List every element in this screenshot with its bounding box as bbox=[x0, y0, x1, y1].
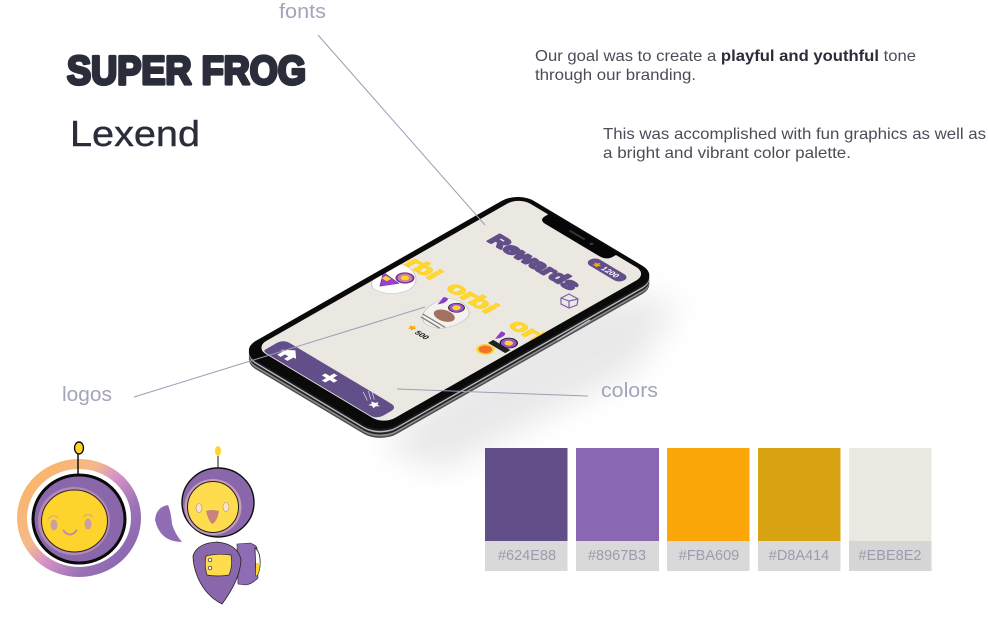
callout line: colors bbox=[397, 389, 588, 396]
phone side button bbox=[557, 320, 590, 340]
mascot head bbox=[182, 468, 254, 537]
text block: goal: Our goal was to create a playful and youthful tone bbox=[535, 48, 916, 65]
coin badge: 1200: 1200 bbox=[599, 265, 622, 279]
swatch: EBE8E2 bbox=[849, 448, 932, 571]
swatch: FBA609: #FBA609 bbox=[679, 548, 739, 564]
heading: Super Frog font sample: SUPER FROG bbox=[67, 49, 306, 93]
sticker: right orbi: orbi bbox=[503, 316, 566, 353]
color palette bbox=[485, 448, 932, 571]
swatch: 624E88 bbox=[485, 448, 568, 571]
heading: Rewards: Rewards bbox=[482, 232, 585, 293]
sticker row: orbi rewards bbox=[371, 258, 546, 355]
swatch: 8967B3: #8967B3 bbox=[588, 548, 646, 564]
label: colors: colors bbox=[601, 380, 658, 402]
sticker: center orbi bbox=[408, 284, 501, 340]
label: logos: logos bbox=[62, 384, 112, 406]
mascot body bbox=[193, 542, 241, 604]
callout line: fonts bbox=[318, 35, 485, 225]
heading: Lexend font sample: Lexend bbox=[70, 113, 200, 154]
swatch: 8967B3 bbox=[576, 448, 659, 571]
nav bar bbox=[263, 339, 398, 419]
swatch: EBE8E2: #EBE8E2 bbox=[859, 548, 921, 564]
icon: shooting star bbox=[354, 389, 389, 409]
swatch: D8A414: #D8A414 bbox=[769, 548, 829, 564]
text block: goal: through our branding. bbox=[535, 67, 696, 84]
swatch: FBA609 bbox=[667, 448, 750, 571]
phone notch bbox=[539, 213, 618, 260]
icon: home bbox=[275, 346, 303, 362]
mascot wing bbox=[155, 505, 182, 542]
icon: plus bbox=[318, 371, 342, 385]
text block: goal bbox=[535, 48, 916, 84]
mascot backpack bbox=[237, 543, 260, 585]
label: fonts: fonts bbox=[279, 1, 326, 23]
sticker: center orbi: orbi bbox=[440, 279, 505, 317]
text block: accomplishment: This was accomplished with fun graphics as well as bbox=[603, 126, 986, 143]
sticker: left orbi: orbi bbox=[386, 246, 448, 283]
coin badge: 1200 bbox=[585, 257, 630, 283]
coin price: 500: 500 bbox=[412, 330, 432, 341]
phone screen bbox=[255, 197, 648, 424]
icon: cube bbox=[561, 294, 578, 308]
callout line: logos bbox=[134, 307, 425, 397]
swatch: 624E88: #624E88 bbox=[498, 548, 556, 564]
sticker: right orbi bbox=[476, 322, 546, 355]
phone mockup bbox=[232, 187, 680, 470]
sticker: left orbi bbox=[371, 258, 444, 294]
swatch: D8A414 bbox=[758, 448, 840, 571]
logo: round mascot badge bbox=[22, 442, 136, 572]
logo: full-body mascot bbox=[155, 446, 260, 604]
text block: accomplishment bbox=[603, 126, 986, 162]
text block: accomplishment: a bright and vibrant color palette. bbox=[603, 145, 851, 162]
mascot chest screen bbox=[205, 554, 232, 576]
